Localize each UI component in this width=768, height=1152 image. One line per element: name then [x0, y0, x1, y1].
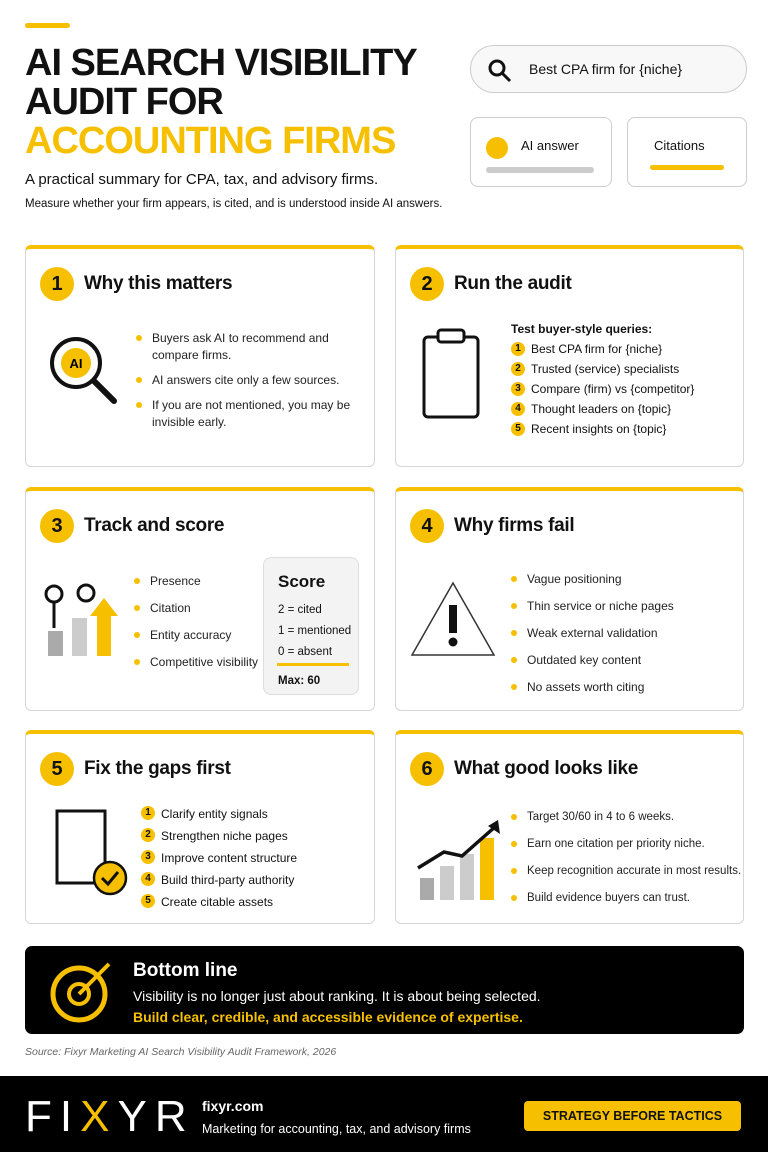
panel 6: what good looks like	[395, 730, 744, 924]
panel 2: run the audit: 3	[515, 383, 521, 394]
footer: fixyr.com	[202, 1098, 263, 1114]
panel 2: run the audit: 5	[515, 423, 521, 434]
strategy badge	[524, 1101, 741, 1131]
panel 6: what good looks like: 6	[421, 758, 433, 780]
panel 5: fix the gaps first: Build third-party authority	[161, 873, 294, 887]
panel 2: run the audit: 1	[515, 343, 521, 354]
panel 3: track and score: Presence	[150, 574, 201, 588]
panel 5: fix the gaps first: Fix the gaps first	[84, 758, 231, 779]
panel 2: run the audit	[395, 245, 744, 467]
panel 3: track and score: Track and score	[84, 515, 224, 536]
search bar illustration	[470, 45, 747, 93]
panel 3: track and score: Entity accuracy	[150, 628, 231, 642]
icon: clipboard	[422, 328, 480, 418]
panel 5: fix the gaps first: 1	[145, 807, 151, 818]
footer	[0, 1076, 768, 1152]
panel 5: fix the gaps first	[25, 730, 375, 924]
AI answer card	[470, 117, 612, 187]
panel 1: why this matters: AI answers cite only a few sources.	[152, 373, 339, 387]
panel 3: track and score	[25, 487, 375, 711]
panel 4: why firms fail: No assets worth citing	[527, 680, 644, 694]
panel 5: fix the gaps first: 3	[145, 851, 151, 862]
strategy badge: STRATEGY BEFORE TACTICS	[543, 1109, 722, 1123]
logo: FIXYR	[25, 1092, 195, 1141]
panel 2: run the audit: Compare (firm) vs {competitor}	[531, 382, 694, 396]
panel 4: why firms fail: Vague positioning	[527, 572, 622, 586]
panel 5: fix the gaps first: Improve content structure	[161, 851, 297, 865]
panel 1: why this matters: Buyers ask AI to recommend and compare firms.	[152, 331, 329, 362]
intro text: Measure whether your firm appears, is cited, and is understood inside AI answers.	[25, 198, 442, 210]
panel 3: track and score: Citation	[150, 601, 191, 615]
panel 2: run the audit: 4	[515, 403, 521, 414]
search bar illustration: Best CPA firm for {niche}	[529, 61, 682, 77]
score box: 1 = mentioned	[278, 625, 351, 637]
panel 4: why firms fail	[395, 487, 744, 711]
panel 2: run the audit: 2	[515, 363, 521, 374]
title: AUDIT FOR	[25, 81, 223, 123]
score box: Score	[278, 572, 325, 591]
footer: Marketing for accounting, tax, and advisory firms	[202, 1122, 471, 1136]
score box: 0 = absent	[278, 646, 332, 658]
bottom line callout	[25, 946, 744, 1034]
source note: Source: Fixyr Marketing AI Search Visibility Audit Framework, 2026	[25, 1046, 336, 1058]
panel 5: fix the gaps first: 2	[145, 829, 151, 840]
score box: 2 = cited	[278, 604, 322, 616]
panel 1: why this matters	[25, 245, 375, 467]
Citations card	[627, 117, 747, 187]
icon: magnifier AI: AI	[70, 356, 82, 371]
score box	[263, 557, 359, 695]
panel 4: why firms fail: Outdated key content	[527, 653, 641, 667]
icon: growth chart	[417, 820, 500, 900]
bottom line callout: Visibility is no longer just about ranking. It is about being selected.	[133, 988, 541, 1004]
icon: bars with magnifiers and arrow	[44, 584, 118, 656]
panel 4: why firms fail: Thin service or niche pages	[527, 599, 674, 613]
panel 1: why this matters: If you are not mentioned, you may be invisible early.	[152, 398, 350, 429]
panel 2: run the audit: 2	[421, 273, 433, 295]
panel 5: fix the gaps first: 5	[145, 895, 151, 906]
header accent bar	[25, 23, 70, 28]
panel 2: run the audit: Recent insights on {topic}	[531, 422, 666, 436]
panel 2: run the audit: Best CPA firm for {niche}	[531, 342, 662, 356]
icon: warning triangle	[410, 582, 496, 656]
panel 2: run the audit: Test buyer-style queries:	[511, 322, 652, 336]
bottom line callout: Build clear, credible, and accessible evidence of expertise.	[133, 1009, 523, 1025]
icon: target	[50, 962, 110, 1022]
panel 1: why this matters: Why this matters	[84, 273, 232, 294]
AI answer card: AI answer	[521, 138, 579, 153]
bottom line callout: Bottom line	[133, 960, 238, 981]
panel 3: track and score: 3	[51, 515, 63, 537]
score box: Max: 60	[278, 675, 320, 687]
title	[25, 42, 418, 162]
icon: magnifier AI	[50, 337, 117, 404]
title: ACCOUNTING FIRMS	[25, 120, 395, 162]
title: AI SEARCH VISIBILITY	[25, 42, 417, 84]
panel 5: fix the gaps first: Strengthen niche pages	[161, 829, 288, 843]
panel 4: why firms fail: Why firms fail	[454, 515, 574, 536]
panel 6: what good looks like: Keep recognition accurate in most results.	[527, 865, 741, 877]
panel 1: why this matters: 1	[51, 273, 63, 295]
panel 6: what good looks like: What good looks like	[454, 758, 638, 779]
icon: document with check	[56, 810, 128, 896]
panel 2: run the audit: Trusted (service) specialists	[531, 362, 679, 376]
Citations card: Citations	[654, 138, 705, 153]
panel 2: run the audit: Thought leaders on {topic}	[531, 402, 671, 416]
panel 5: fix the gaps first: 5	[51, 758, 63, 780]
subtitle: A practical summary for CPA, tax, and advisory firms.	[25, 171, 378, 188]
panel 3: track and score: Competitive visibility	[150, 655, 258, 669]
panel 5: fix the gaps first: 4	[145, 873, 151, 884]
panel 6: what good looks like: Earn one citation per priority niche.	[527, 838, 705, 850]
panel 5: fix the gaps first: Clarify entity signals	[161, 807, 268, 821]
panel 4: why firms fail: Weak external validation	[527, 626, 658, 640]
panel 2: run the audit: Run the audit	[454, 273, 571, 294]
panel 4: why firms fail: 4	[421, 515, 433, 537]
panel 6: what good looks like: Target 30/60 in 4 to 6 weeks.	[527, 811, 674, 823]
panel 5: fix the gaps first: Create citable assets	[161, 895, 273, 909]
panel 6: what good looks like: Build evidence buyers can trust.	[527, 892, 690, 904]
